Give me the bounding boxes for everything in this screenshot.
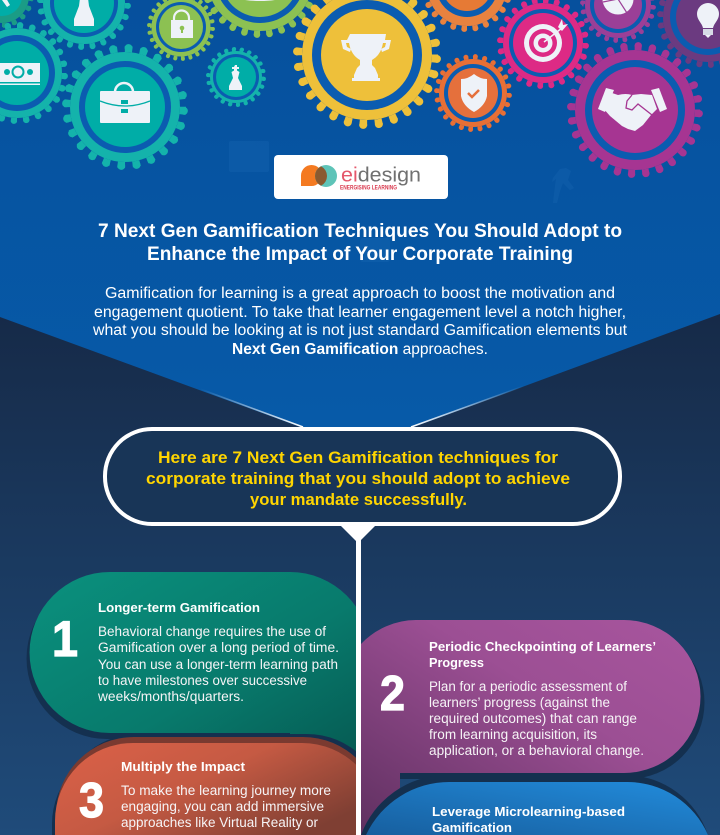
body 3: To make the learning journey more (121, 783, 331, 798)
panel 4: Leverage Microlearning: Gamification (432, 821, 512, 835)
callout bubble: your mandate successfully. (250, 490, 467, 509)
gear: padlock (149, 0, 213, 59)
body 2: Plan for a periodic assessment of (429, 679, 627, 694)
gear: chess king (208, 49, 264, 105)
background: dark lower section (0, 314, 720, 835)
body 2 (429, 679, 644, 758)
number 2: 2 (380, 667, 405, 721)
intro paragraph: Gamification for learning is a great approach to boost the motivation and (105, 285, 615, 302)
gear: handshake (570, 46, 700, 174)
body 1: Gamification over a long period of time. (98, 640, 339, 655)
logo mark (301, 165, 337, 187)
heading 1: Longer-term Gamification (98, 601, 260, 615)
title: 7 Next Gen Gamification Techniques You Should Adopt to (98, 221, 622, 242)
heading 2: Periodic Checkpointing of Learners’ (429, 640, 656, 654)
callout bubble: Here are 7 Next Gen Gamification techniques for (158, 448, 558, 467)
gear: orange top (424, 0, 510, 29)
title: Enhance the Impact of Your Corporate Training (147, 244, 573, 265)
panel 2: Periodic Checkpointing: Progress (429, 656, 484, 670)
panel 3: Multiply the Impact (52, 734, 385, 835)
gear: green top (203, 0, 317, 35)
body 1: to have milestones over successive (98, 673, 307, 688)
callout bubble: corporate training that you should adopt to achieve (146, 469, 570, 488)
number 3: 3 (79, 774, 104, 828)
intro paragraph: Next Gen Gamification approaches. (232, 341, 488, 358)
gear: shield (436, 56, 510, 130)
panel 1: Longer-term Gamification (26, 572, 356, 751)
body 3: engaging, you can add immersive (121, 799, 324, 814)
intro paragraph: engagement quotient. To take that learner engagement level a notch higher, (94, 304, 626, 321)
gear: pie chart (582, 0, 654, 41)
intro paragraph (92, 285, 628, 358)
body 2: application, or a behavioral change. (429, 743, 644, 758)
gear: chess pawn teal (40, 0, 128, 47)
number 1: 1 (52, 611, 78, 667)
funnel highlight lines (200, 386, 524, 427)
heading 3: Multiply the Impact (121, 760, 246, 774)
body 1: Behavioral change requires the use of (98, 624, 326, 639)
body 2: learners’ progress (against the (429, 695, 610, 710)
body 1: weeks/months/quarters. (97, 689, 244, 704)
faint background icons (229, 141, 574, 262)
logo tagline: ENERGISING LEARNING (340, 184, 397, 192)
panel 4: Leverage Microlearning (361, 775, 708, 835)
body 3 (121, 783, 331, 830)
title (98, 221, 622, 265)
gear: lightbulb (660, 0, 720, 65)
gear: ribbon (0, 0, 32, 26)
logo wordmark: eidesign (341, 164, 421, 186)
background: blue header (0, 0, 720, 470)
gear: money (0, 25, 65, 121)
heading 4: Leverage Microlearning-based (432, 805, 625, 819)
callout bubble (105, 429, 620, 543)
connector line (356, 530, 361, 835)
gear: target (500, 0, 586, 86)
body 2: required outcomes) that can range (429, 711, 637, 726)
panel 2: Periodic Checkpointing (361, 620, 705, 835)
body 1: You can use a longer-term learning path (98, 657, 338, 672)
logo card (274, 155, 448, 199)
body 2: from learning acquisition, its (429, 727, 597, 742)
body 1 (97, 624, 339, 704)
gear: briefcase (66, 48, 184, 166)
intro paragraph: what you should be looking at is not just standard Gamification elements but (92, 322, 628, 339)
body 3: approaches like Virtual Reality or (121, 815, 318, 830)
gear: trophy (297, 0, 437, 125)
